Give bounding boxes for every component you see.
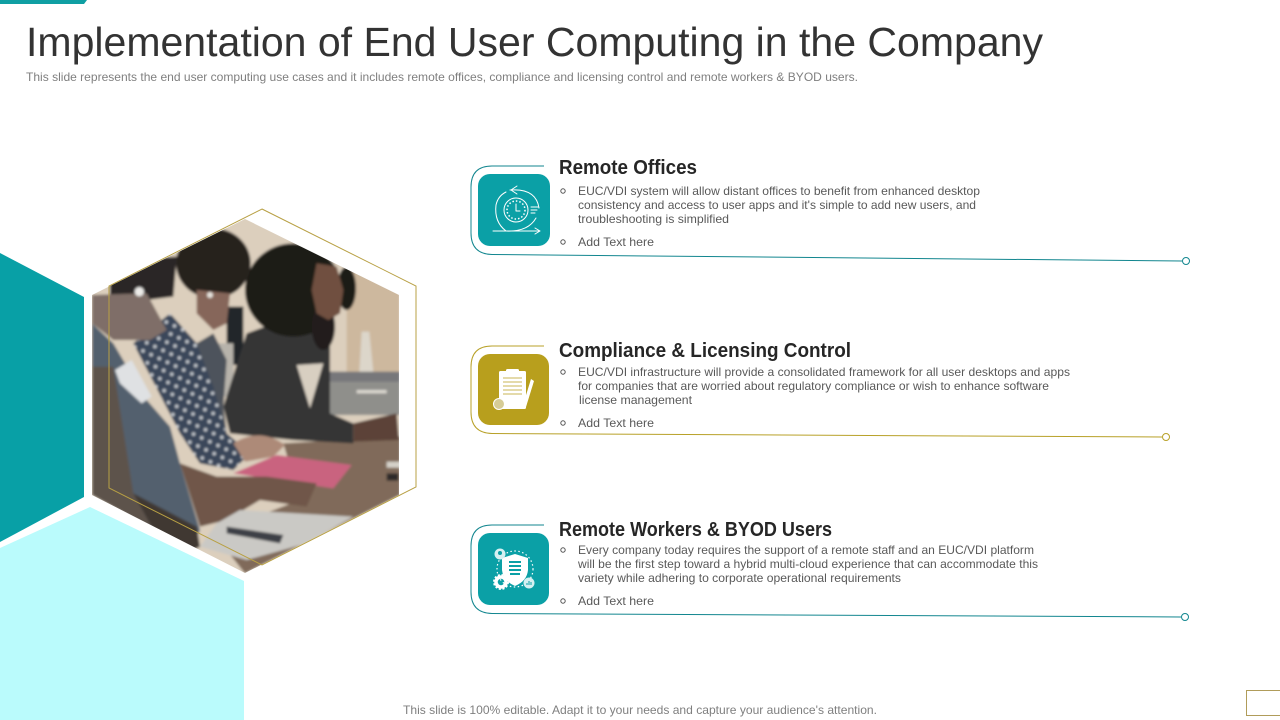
bullets: compliance: for companies that are worried about regulatory compliance or wish to enhance software (578, 379, 1049, 393)
heading: remote offices: Remote Offices (559, 157, 697, 179)
bullets: compliance: Add Text here (578, 416, 654, 430)
end node: remote offices (1182, 258, 1190, 264)
top accent bar (0, 0, 87, 4)
panel: compliance and licensing control (471, 340, 1170, 440)
bullets: compliance: EUC/VDI infrastructure will provide a consolidated framework for all user desktops and apps (578, 365, 1070, 379)
page number box (1246, 690, 1280, 716)
connector line: remote workers (471, 525, 1181, 617)
decorative teal hexagon (0, 253, 84, 542)
heading: remote workers: Remote Workers & BYOD Users (559, 519, 832, 541)
end node: remote workers (1182, 614, 1188, 620)
decorative light cyan hexagon (0, 507, 244, 720)
bullets: compliance (561, 365, 1070, 430)
bullets: remote workers: Every company today requires the support of a remote staff and an EUC/VDI platform (578, 543, 1034, 557)
panel: remote offices (471, 157, 1190, 264)
bullets: remote workers: variety while adhering to corporate operational requirements (578, 571, 901, 585)
gold hexagon outline (109, 209, 416, 565)
bullets: remote workers (561, 543, 1038, 608)
photo: team meeting in hexagon (90, 217, 400, 577)
bullets: remote offices (561, 184, 980, 249)
heading: compliance: Compliance & Licensing Control (559, 340, 851, 362)
bullets: compliance: license management (579, 393, 693, 407)
end node: compliance (1162, 434, 1170, 440)
bullets: remote workers: will be the first step toward a hybrid multi-cloud experience that can accommodate this (577, 557, 1038, 571)
bullets: remote workers: Add Text here (578, 594, 654, 608)
bullets: remote offices: troubleshooting is simplified (578, 212, 729, 226)
connector line: remote offices (471, 166, 1182, 261)
connector line: compliance (471, 346, 1162, 437)
bullets: remote offices: consistency and access to user apps and it's simple to add new users, and (578, 198, 976, 212)
subtitle: This slide represents the end user computing use cases and it includes remote offices, compliance and licensing control and remote workers & BYOD users. (26, 70, 858, 84)
panel: remote workers and BYOD users (471, 519, 1188, 620)
bullets: remote offices: EUC/VDI system will allow distant offices to benefit from enhanced desktop (578, 184, 980, 198)
icon: clipboard with pen (478, 354, 549, 425)
footer note: This slide is 100% editable. Adapt it to your needs and capture your audience's attention. (403, 703, 877, 717)
icon: stopwatch with cycle arrows (478, 174, 550, 246)
title: Implementation of End User Computing in the Company (26, 19, 1043, 65)
bullets: remote offices: Add Text here (578, 235, 654, 249)
icon: security shield with user, gear and chart (478, 533, 549, 605)
